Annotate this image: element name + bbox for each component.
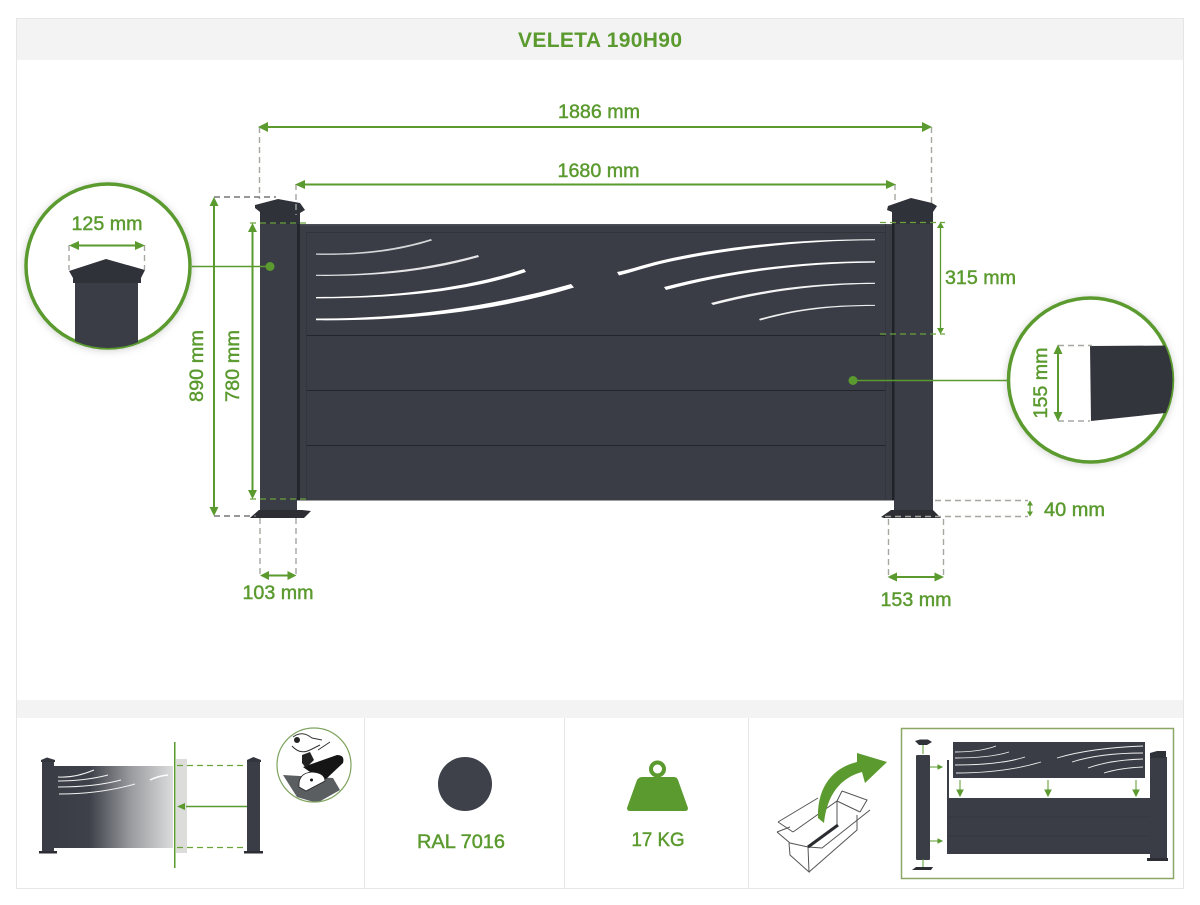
cut line <box>174 742 176 868</box>
right post <box>881 198 941 518</box>
dimension: 890 mm: 890 mm <box>187 330 208 402</box>
icon: weight <box>627 762 688 811</box>
callout: post cap 125 mm <box>26 184 190 350</box>
dimension: 780 mm: 780 mm <box>223 330 244 402</box>
left post <box>912 740 933 870</box>
icon: cutting tool <box>277 728 351 803</box>
callout: post cap 125 mm: 125 mm <box>72 214 142 235</box>
exploded fence <box>912 740 1168 870</box>
leader: post <box>192 262 274 271</box>
title: VELETA 190H90 <box>518 29 682 52</box>
ghost post <box>176 759 187 853</box>
title band <box>17 19 1183 60</box>
weight label: 17 KG <box>632 830 684 851</box>
dimension: 103 mm <box>242 518 314 604</box>
panel: cut to size <box>39 728 351 868</box>
decorative cut-outs left <box>316 239 574 320</box>
bottom panels <box>947 760 1151 854</box>
dimension: 1886 mm: 1886 mm <box>558 102 640 123</box>
dimension: 890 mm <box>187 197 276 516</box>
dimension: 780 mm <box>223 223 310 499</box>
decorative cut-outs right <box>617 239 875 320</box>
callout: plank 155 mm <box>1008 298 1175 462</box>
colour swatch <box>438 757 492 811</box>
top panel <box>953 742 1145 778</box>
panel: assembly <box>777 728 1174 878</box>
icon: open box <box>777 791 870 872</box>
dimension: 40 mm <box>885 500 1105 521</box>
panel: colour <box>417 757 505 853</box>
dimension: 315 mm: 315 mm <box>945 268 1016 289</box>
right post <box>244 757 263 854</box>
panel: weight <box>627 762 688 851</box>
bottom band <box>17 700 1183 718</box>
dimension: 153 mm <box>880 519 952 611</box>
callout: plank 155 mm: 155 mm <box>1031 348 1052 418</box>
panel <box>297 224 894 500</box>
fence drawing <box>250 198 941 518</box>
dimension: 40 mm: 40 mm <box>1044 500 1105 521</box>
assembly frame <box>902 728 1174 878</box>
dimension: 1680 mm: 1680 mm <box>558 161 640 182</box>
dimension: 103 mm: 103 mm <box>242 583 314 604</box>
faded fence <box>39 758 173 854</box>
arrow: out of box <box>818 753 887 823</box>
leader: plank <box>848 376 1007 385</box>
assembly arrows <box>923 745 1139 867</box>
dimension: 315 mm <box>880 222 1016 334</box>
arrow and dashes <box>177 766 247 848</box>
colour label: RAL 7016 <box>417 832 505 853</box>
dimension: 1886 mm <box>258 102 932 205</box>
dimension: 153 mm: 153 mm <box>880 590 952 611</box>
dimension: 1680 mm <box>295 161 896 215</box>
right post <box>1147 751 1168 861</box>
left post <box>250 199 311 518</box>
